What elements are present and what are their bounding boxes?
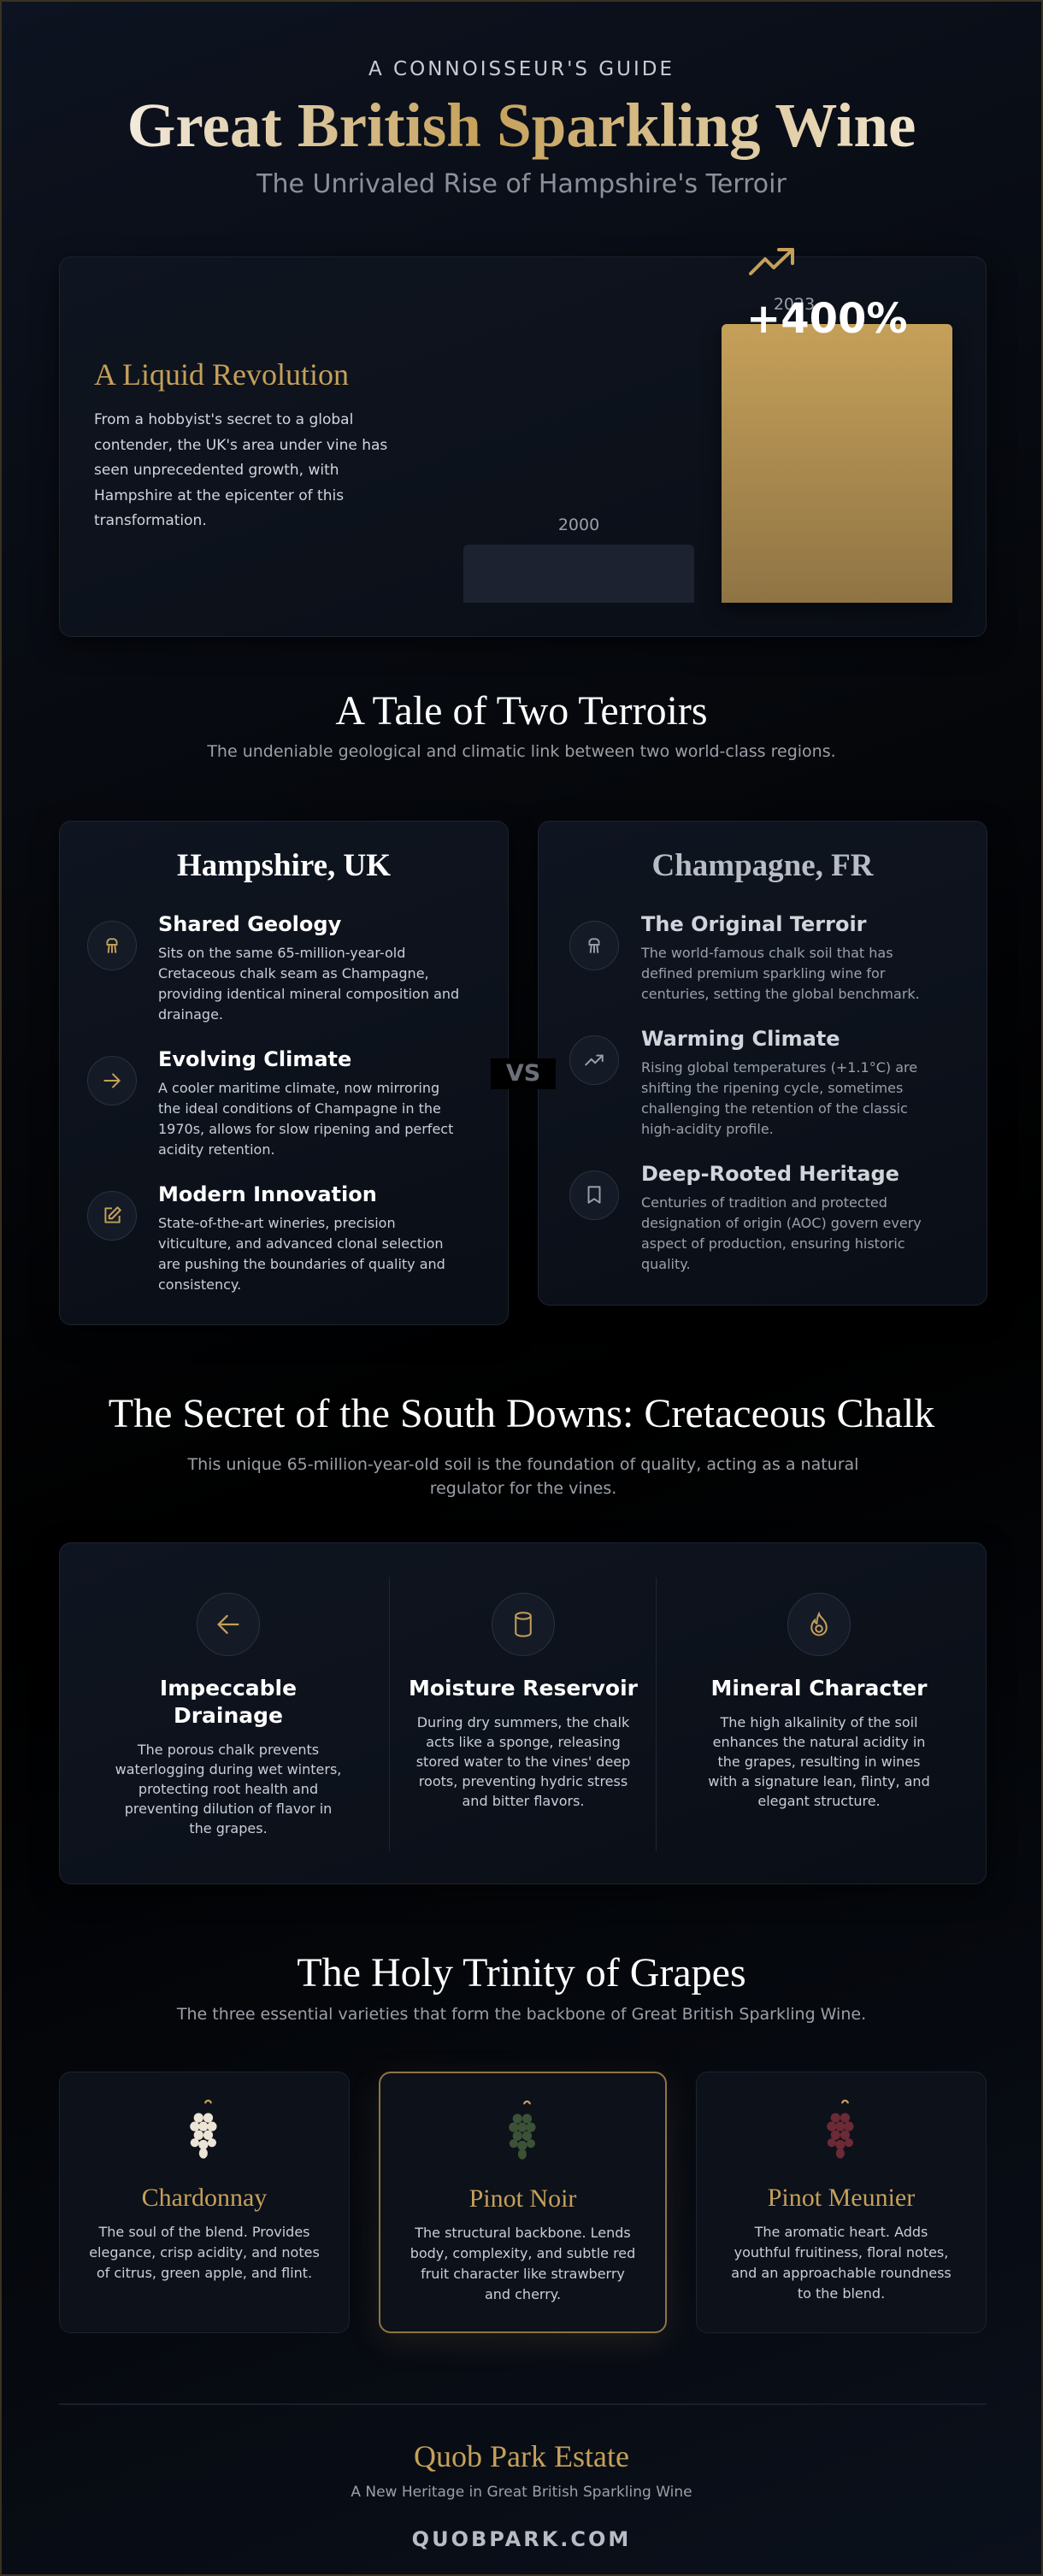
column: mineral: The high alkalinity of the soil enhances the natural acidity in the grapes, resulting in wines with a signature lean, flinty, and elegant structure.	[708, 1714, 930, 1809]
item: original terroir	[569, 912, 920, 1002]
card: pinot noir: Pinot Noir	[469, 2184, 576, 2213]
item: heritage: Centuries of tradition and protected designation of origin (AOC) govern every aspect of production, ensuring historic quality.	[641, 1194, 922, 1272]
item: evolving climate: Evolving Climate	[158, 1047, 351, 1071]
bar 2000	[463, 545, 694, 603]
card: pinot meunier: The aromatic heart. Adds youthful fruitiness, floral notes, and an approachable roundness to the blend.	[731, 2224, 952, 2302]
panel: hampshire	[59, 821, 509, 1325]
panel: chalk properties	[59, 1542, 987, 1884]
item: modern innovation: State-of-the-art wineries, precision viticulture, and advanced clonal selection are pushing the boundaries of quality and consistency.	[158, 1215, 445, 1293]
column: drainage: The porous chalk prevents waterlogging during wet winters, protecting root health and preventing dilution of flavor in the grapes.	[115, 1742, 341, 1836]
subheading: The undeniable geological and climatic link between two world-class regions.	[207, 742, 836, 761]
item: warming climate: Warming Climate	[641, 1027, 840, 1051]
item: modern innovation: Modern Innovation	[158, 1182, 377, 1206]
subheading: This unique 65-million-year-old soil is the foundation of quality, acting as a natural regulator for the vines.	[188, 1455, 858, 1498]
vs badge: VS	[506, 1060, 540, 1087]
column: drainage: Drainage	[174, 1703, 283, 1728]
footer: tagline: A New Heritage in Great British Sparkling Wine	[351, 2484, 692, 2501]
panel: champagne	[538, 821, 987, 1306]
kicker: A CONNOISSEUR'S GUIDE	[368, 58, 675, 80]
icon: green grapes	[509, 2100, 535, 2160]
item: original terroir: The world-famous chalk soil that has defined premium sparkling wine for centuries, setting the global benchmark.	[641, 945, 920, 1002]
card: pinot meunier	[696, 2072, 987, 2333]
item: warming climate	[569, 1027, 917, 1137]
card: pinot noir: The structural backbone. Lends body, complexity, and subtle red fruit character like strawberry and cherry.	[410, 2225, 635, 2302]
subtitle: The Unrivaled Rise of Hampshire's Terroir	[256, 169, 787, 199]
item: modern innovation	[87, 1182, 445, 1293]
icon: trend up	[749, 248, 795, 275]
subheading: The three essential varieties that form the backbone of Great British Sparkling Wine.	[177, 2005, 866, 2024]
title: Great British Sparkling Wine	[127, 91, 916, 160]
column: moisture: During dry summers, the chalk acts like a sponge, releasing stored water to the vines' deep roots, preventing hydric stress and bitter flavors.	[416, 1714, 630, 1809]
bar chart	[463, 248, 952, 605]
bar 2023	[722, 324, 952, 603]
item: evolving climate	[87, 1047, 453, 1158]
column: moisture: Moisture Reservoir	[409, 1676, 638, 1701]
card: chardonnay: The soul of the blend. Provides elegance, crisp acidity, and notes of citrus, green apple, and flint.	[89, 2224, 320, 2281]
icon: white grapes	[190, 2100, 217, 2159]
heading: A Liquid Revolution	[94, 357, 349, 392]
bar chart: 2023	[774, 295, 815, 314]
column: mineral: Mineral Character	[711, 1676, 927, 1701]
item: shared geology: Shared Geology	[158, 912, 341, 936]
column: drainage: Impeccable	[160, 1676, 297, 1701]
panel: liquid revolution	[59, 256, 987, 637]
footer: estate name: Quob Park Estate	[414, 2439, 629, 2473]
heading: chalk: The Secret of the South Downs: Cretaceous Chalk	[109, 1391, 934, 1436]
item: original terroir: The Original Terroir	[641, 912, 867, 936]
card: pinot meunier: Pinot Meunier	[768, 2184, 915, 2212]
vs badge	[491, 1058, 556, 1089]
column: moisture	[409, 1593, 638, 1809]
card title: Champagne, FR	[651, 848, 874, 883]
column: mineral	[708, 1593, 930, 1809]
item: warming climate: Rising global temperatures (+1.1°C) are shifting the ripening cycle, sometimes challenging the retention of the classic high-acidity profile.	[641, 1059, 917, 1137]
text block: From a hobbyist's secret to a global contender, the UK's area under vine has seen unprecedented growth, with Hampshire at the epicenter of this transformation.	[94, 411, 387, 529]
card: chardonnay	[59, 2072, 350, 2333]
callout: +400%: +400%	[746, 295, 908, 343]
item: heritage	[569, 1162, 922, 1272]
footer: url: QUOBPARK.COM	[412, 2527, 631, 2551]
item: heritage: Deep-Rooted Heritage	[641, 1162, 899, 1186]
heading: grapes: The Holy Trinity of Grapes	[297, 1950, 746, 1995]
card title: Hampshire, UK	[177, 848, 391, 883]
column: drainage	[115, 1593, 341, 1836]
card: pinot noir	[379, 2072, 667, 2333]
item: shared geology: Sits on the same 65-million-year-old Cretaceous chalk seam as Champagne, providing identical mineral composition and drainage.	[158, 945, 459, 1023]
icon: red grapes	[827, 2100, 854, 2159]
item: evolving climate: A cooler maritime climate, now mirroring the ideal conditions of Champagne in the 1970s, allows for slow ripening and perfect acidity retention.	[158, 1080, 453, 1158]
card: chardonnay: Chardonnay	[142, 2184, 267, 2212]
item: shared geology	[87, 912, 459, 1023]
heading: tale of two terroirs: A Tale of Two Terroirs	[335, 688, 708, 734]
bar chart: 2000	[558, 516, 599, 534]
